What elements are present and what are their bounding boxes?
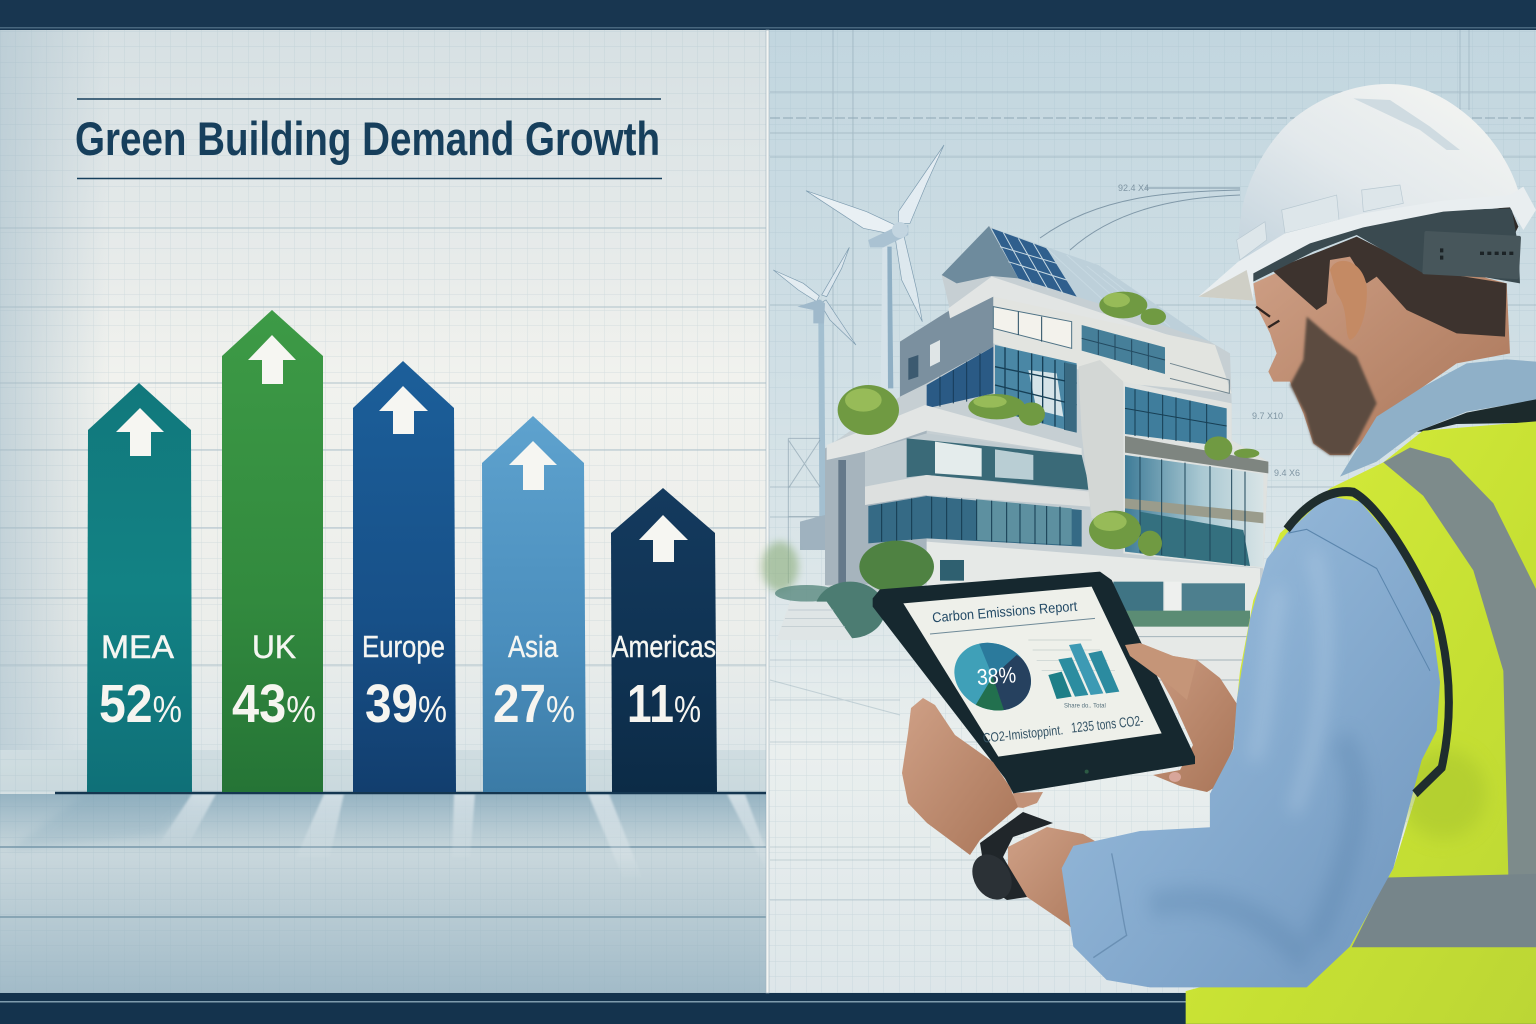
- icon: large wind turbine: [806, 145, 944, 388]
- bottom banner: [0, 993, 1536, 1024]
- tablet footer text: CO2-Imistoppint.: [982, 722, 1064, 746]
- right hand behind tablet: [1125, 643, 1237, 792]
- head and hard hat: [1198, 84, 1536, 477]
- illustration: wind turbines and green building: [762, 145, 1268, 700]
- building central column: [1078, 360, 1123, 518]
- floor shadows and light shafts: [0, 793, 766, 880]
- building silhouette: [825, 226, 1268, 630]
- building main glass floor: [995, 345, 1077, 433]
- bar: Americas 11%: Americas: [612, 629, 716, 664]
- panel: left chart background: [0, 30, 768, 993]
- bar chart: regional demand growth: [87, 310, 717, 792]
- building top floor: [948, 277, 1232, 393]
- left hand: [902, 698, 1018, 855]
- tablet: [873, 572, 1195, 793]
- vest collar band: [1417, 399, 1536, 432]
- bar: Asia 27%: 27%: [493, 674, 575, 734]
- bar: UK 43%: UK: [252, 629, 296, 665]
- panel: right illustration background: [768, 30, 1536, 993]
- eye: [1256, 307, 1279, 327]
- finger tip behind tablet: [1013, 792, 1043, 808]
- hair: [1272, 237, 1507, 337]
- pie chart: 38%: [976, 661, 1017, 690]
- helmet vents: [1237, 185, 1403, 260]
- icon: up arrow: [248, 335, 296, 384]
- bar: UK 43%: [222, 310, 323, 792]
- helmet brim: [1198, 187, 1536, 301]
- building right wing: [1123, 382, 1268, 568]
- face and neck: [1253, 243, 1510, 455]
- armhole binding: [1287, 492, 1449, 794]
- heading: chart title: Green Building Demand Growth: [75, 112, 660, 165]
- vest body: [1186, 421, 1536, 1024]
- forearm: [1008, 827, 1110, 940]
- wristwatch: [964, 812, 1053, 907]
- entrance steps: [777, 602, 853, 640]
- trees and planting: [762, 292, 1259, 638]
- tablet heading: Carbon Emissions Report: [932, 598, 1078, 625]
- panel: right illustration background: 9.4 X6: [1274, 468, 1300, 478]
- pie chart: [954, 642, 1031, 710]
- torso: [1186, 421, 1536, 1024]
- headband and ratchet: [1247, 208, 1521, 283]
- ear: [1330, 261, 1367, 340]
- panel: right illustration background: 9.7 X10: [1252, 411, 1283, 421]
- heading: chart title: [75, 99, 662, 178]
- panel divider: [766, 30, 769, 993]
- finger nail: [1169, 772, 1181, 782]
- bar: Americas 11%: [611, 488, 717, 792]
- helmet back shadow: [1410, 207, 1518, 237]
- bar: Europe 39%: [353, 361, 456, 792]
- bar: MEA 52%: 52%: [99, 674, 182, 734]
- bar: MEA 52%: MEA: [101, 629, 175, 665]
- icon: up arrow: [116, 408, 164, 456]
- bar: Americas 11%: 11%: [627, 674, 701, 734]
- sleeve: [1062, 492, 1449, 987]
- reflective stripe horizontal: [1352, 874, 1536, 947]
- bar: Europe 39%: 39%: [365, 674, 447, 734]
- icon: up arrow: [379, 386, 428, 434]
- solar roof: [942, 226, 1210, 342]
- low wall behind tower: [800, 515, 825, 550]
- building terrace and mid floor: [827, 405, 1090, 547]
- bar: Asia 27%: Asia: [508, 629, 559, 664]
- building left wing: [825, 297, 993, 585]
- bar: MEA 52%: [87, 383, 192, 792]
- scaffold lines: [788, 438, 825, 583]
- helmet ridge: [1353, 98, 1460, 150]
- bar: Europe 39%: Europe: [362, 629, 445, 664]
- vest shade: [1400, 749, 1487, 838]
- bar: Asia 27%: [482, 416, 586, 792]
- tablet: 1235 tons CO2-: [1070, 712, 1144, 736]
- panel: right illustration background: 92.4 X4: [1118, 183, 1149, 193]
- icon: up arrow: [509, 441, 557, 490]
- illustration: engineer: [873, 84, 1536, 1024]
- right thumb over tablet: [1125, 643, 1197, 700]
- icon: small wind turbine: [773, 247, 856, 517]
- beard: [1290, 317, 1377, 455]
- helmet dome: [1239, 84, 1520, 260]
- top banner: [0, 0, 1536, 30]
- bar chart on tablet: [1028, 640, 1119, 709]
- reflective stripe vertical: [1383, 447, 1536, 876]
- building base: [927, 542, 1260, 700]
- icon: up arrow: [639, 515, 688, 562]
- bar chart on tablet: Share do.. Total: [1064, 703, 1106, 709]
- bar: UK 43%: 43%: [232, 674, 316, 734]
- shirt collar: [1340, 359, 1536, 477]
